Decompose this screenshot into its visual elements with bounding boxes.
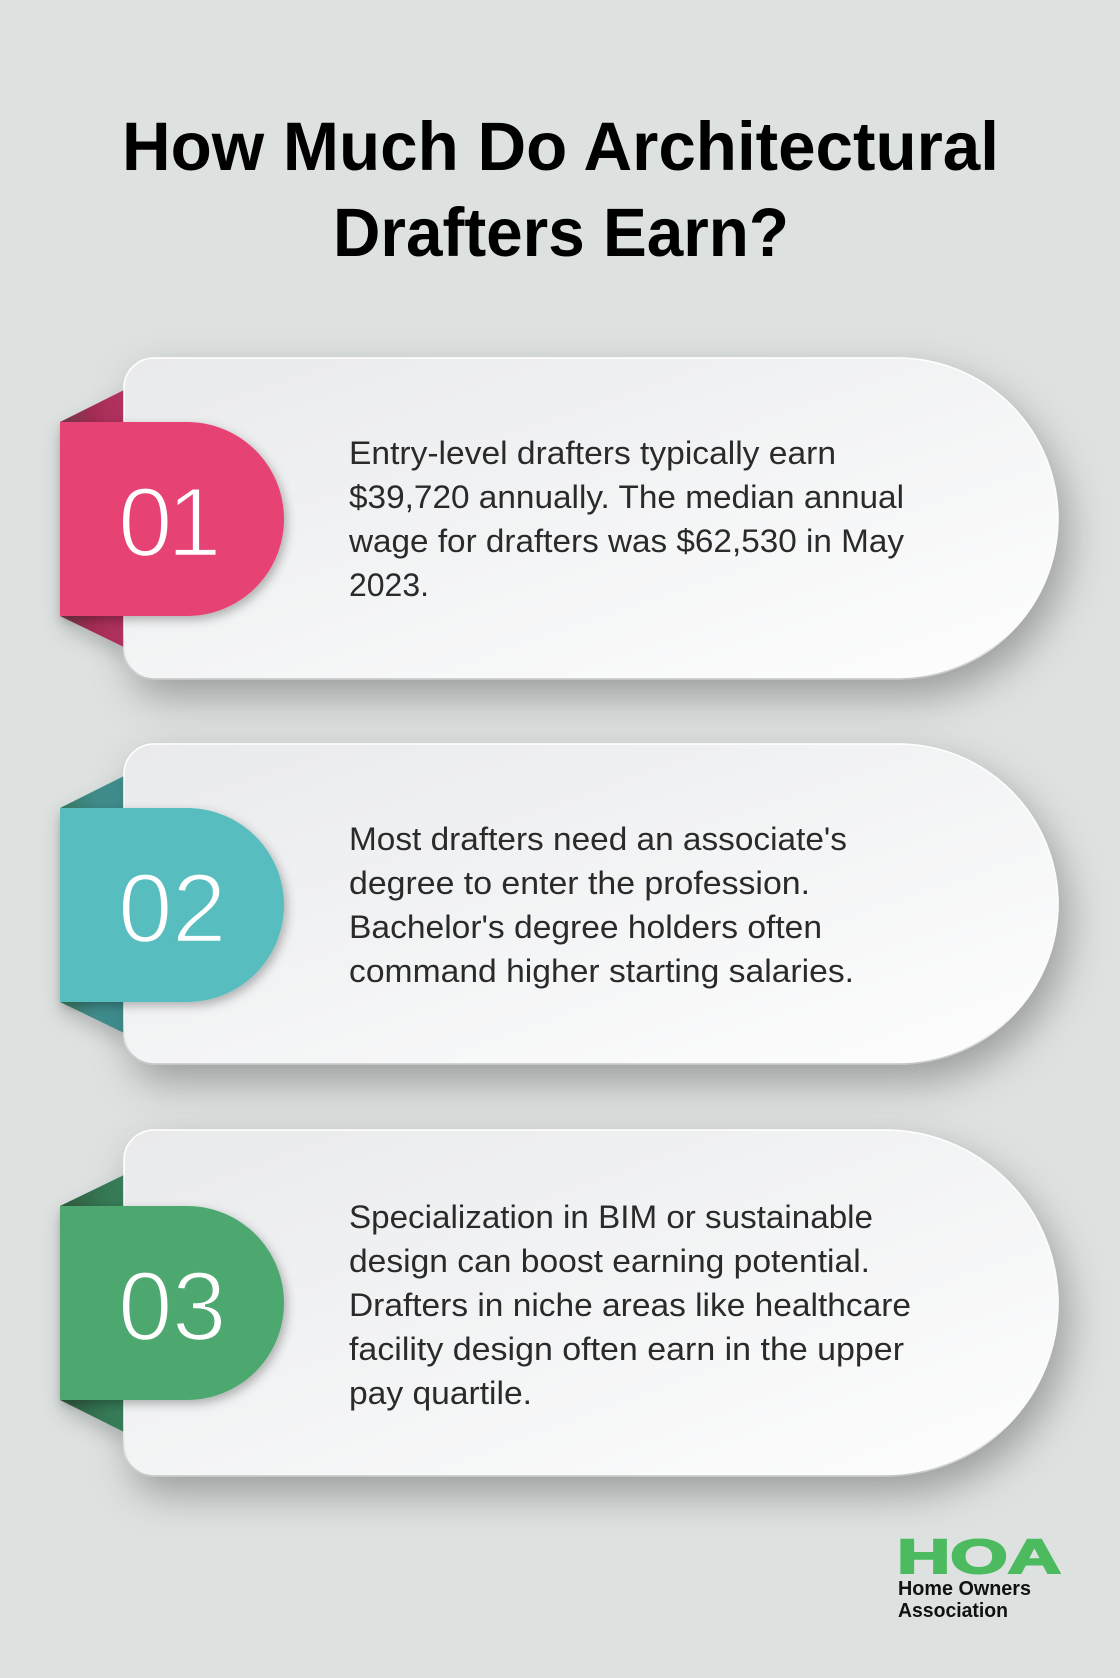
text: step 01 [348,435,905,603]
ribbon fold: step 03 [60,1174,126,1433]
card: step 01 [124,358,1058,679]
logo: HOA: HOA [897,1531,1061,1584]
text: step 03: facility design often earn in the upper [349,1331,904,1367]
title: How Much Do Architectural [122,108,999,185]
number tab: step 03 [60,1206,284,1400]
text: step 01: $39,720 annually. The median annual [349,479,904,515]
logo: HOA [897,1531,1061,1622]
text: step 03: design can boost earning potential. [349,1243,870,1279]
text: step 01: Entry-level drafters typically earn [349,435,836,471]
panel: step 03 [60,1130,1058,1476]
panel: step 01 [60,358,1058,679]
number: 02: 02 [118,853,227,963]
ribbon fold: step 02 [60,775,126,1034]
number: 01: 01 [118,467,222,577]
number: 03: 03 [118,1251,227,1361]
card: step 02 [124,744,1058,1064]
text: step 02: Bachelor's degree holders often [349,909,822,945]
text: step 03 [349,1199,911,1411]
logo: HOA: Association [898,1600,1008,1622]
number tab: step 01 [60,422,284,616]
text: step 02: command higher starting salaries. [349,953,854,989]
panel: step 02 [60,744,1058,1064]
title [122,108,999,271]
text: step 01: 2023. [349,567,429,603]
text: step 01: wage for drafters was $62,530 in May [348,523,905,559]
text: step 03: pay quartile. [349,1375,532,1411]
card: step 03 [124,1130,1058,1476]
number tab: step 02 [60,808,284,1002]
logo: HOA: Home Owners [898,1578,1031,1600]
ribbon fold: step 01 [60,389,126,648]
text: step 03: Drafters in niche areas like healthcare [349,1287,911,1323]
text: step 03: Specialization in BIM or sustainable [349,1199,873,1235]
text: step 02 [349,821,854,989]
text: step 02: Most drafters need an associate's [349,821,847,857]
title: Drafters Earn? [333,194,789,271]
text: step 02: degree to enter the profession. [349,865,810,901]
